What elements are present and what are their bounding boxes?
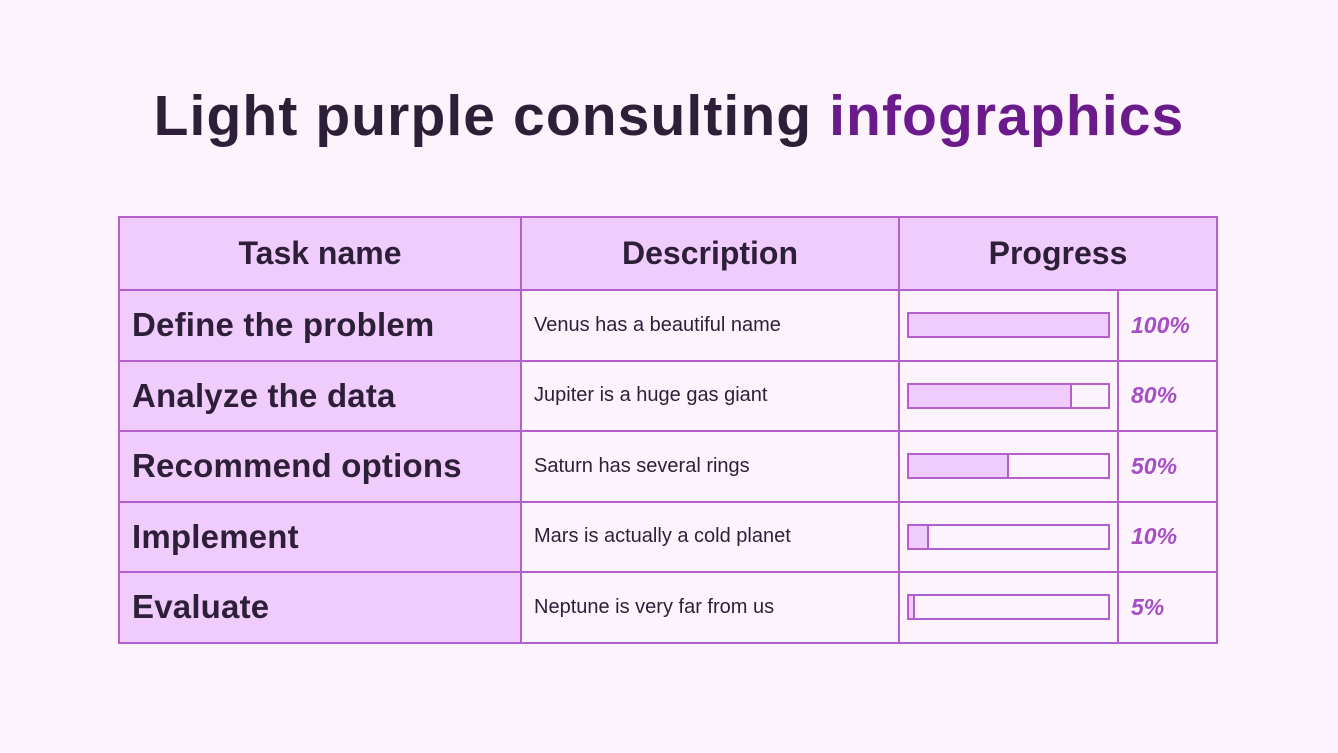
- table: 5%: [1131, 594, 1164, 620]
- table: Saturn has several rings: [534, 455, 750, 477]
- table: Jupiter is a huge gas giant: [534, 384, 768, 406]
- table: Implement: [132, 518, 299, 555]
- table: Recommend options: [132, 447, 462, 484]
- table: 10%: [1131, 523, 1177, 549]
- table: Progress: [989, 235, 1127, 271]
- table: Task name: [238, 235, 402, 271]
- table: [118, 216, 1218, 644]
- table: Analyze the data: [132, 377, 396, 414]
- title: Light purple consulting infographics: [154, 84, 1184, 148]
- table: 80%: [1131, 382, 1177, 408]
- table: 50%: [1131, 453, 1177, 479]
- table: Description: [622, 235, 798, 271]
- table: Neptune is very far from us: [534, 596, 774, 618]
- table: Evaluate: [132, 588, 269, 625]
- table: Venus has a beautiful name: [534, 314, 781, 336]
- table: 100%: [1131, 312, 1190, 338]
- table: Define the problem: [132, 306, 434, 343]
- table: Mars is actually a cold planet: [534, 525, 791, 547]
